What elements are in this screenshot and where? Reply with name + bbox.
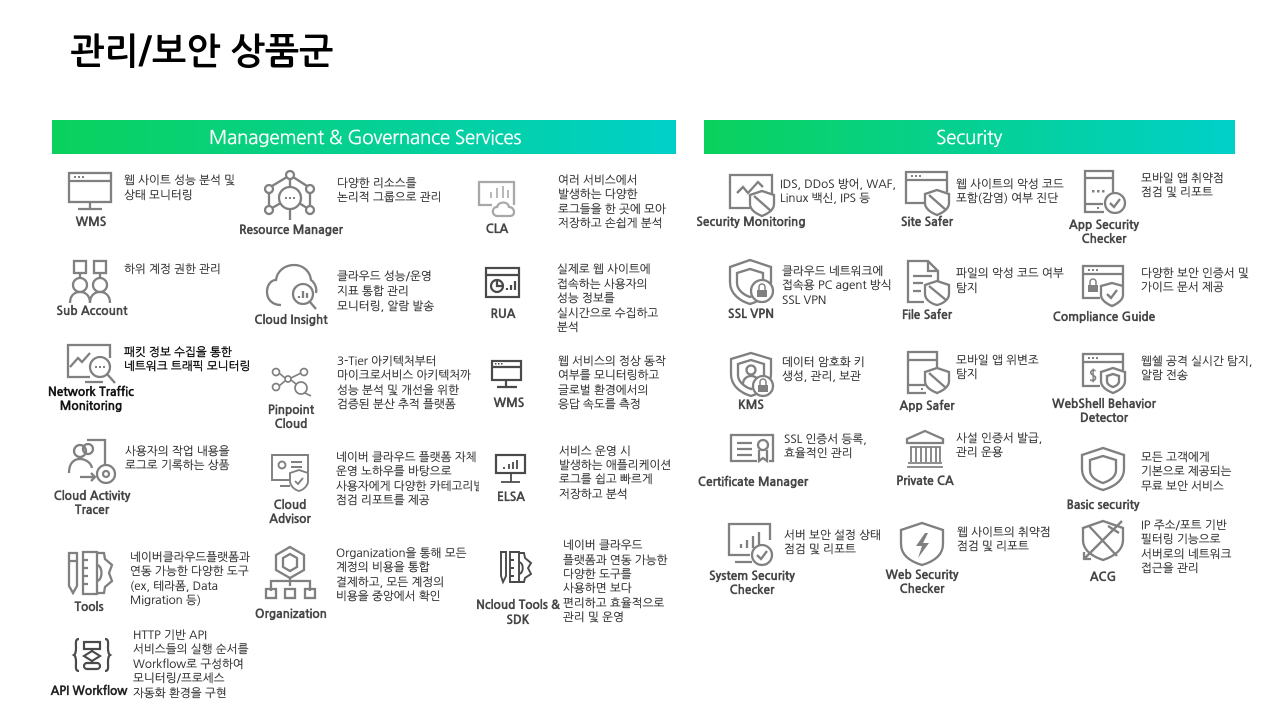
icon: users with gear [69,440,115,483]
description: 결제하고, 모든 계정의 [336,576,444,588]
description: 모니터링/프로세스 [133,672,225,684]
description: 서버 보안 설정 상태 [784,529,881,541]
description: 접속용 PC agent 방식 [782,279,892,291]
description: 가이드 문서 제공 [1141,281,1224,293]
description: 성능 정보를 [557,292,615,304]
description: 검증된 분산 추적 플랫폼 [337,398,456,410]
panel: Security Monitoring [696,175,896,228]
description: 모든 고객에게 [1141,451,1210,463]
description: 논리적 그룹으로 관리 [337,191,442,203]
description: 클라우드 성능/운영 [337,270,432,282]
description: 탐지 [956,282,978,294]
label: ACG [1090,571,1116,583]
icon: chart with shield [730,175,774,216]
panel: WMS small [492,355,666,410]
description: Organization을 통해 모든 [336,547,467,559]
description: 점검 리포트를 제공 [336,494,430,506]
description: Workflow로 구성하여 [133,658,244,670]
description: 사용하면 보다 [563,582,632,594]
icon: phone with shield [908,352,949,393]
label: Private CA [896,475,954,487]
description: 계정의 비용을 통합 [336,561,430,573]
description: 모바일 앱 위변조 [956,354,1039,366]
description: 로그로 기록하는 상품 [125,459,230,471]
icon: cloud with magnifier [267,265,316,309]
description: 점검 및 리포트 [784,543,856,555]
icon: pencil ruler gear [69,552,112,594]
label: Tools [74,601,104,613]
description: (ex, 테라폼, Data [130,580,218,592]
icon: traffic chart and magnifier [68,345,115,383]
description: 운영 노하우를 바탕으로 [336,465,452,477]
description: 파일의 악성 코드 여부 [956,267,1064,279]
description: 실제로 웹 사이트에 [557,263,651,275]
description: Migration 등) [130,594,201,606]
heading: Security: Security [936,128,1002,147]
icon: monitor with shield [272,455,308,491]
panel: Site Safer [901,172,1064,228]
label: Security Monitoring [696,216,806,228]
description: 알람 전송 [1141,369,1188,381]
panel: Tools [69,551,250,613]
icon: shield with lightning [901,523,943,565]
label: Monitoring [60,400,122,412]
label: RUA [491,308,516,320]
description: 연동 가능한 다양한 도구 [130,565,249,577]
description: 기본으로 제공되는 [1141,465,1232,477]
description: 웹 사이트 성능 분석 및 [124,174,235,186]
panel: Cloud Insight [254,265,434,326]
description: IDS, DDoS 방어, WAF, [780,178,896,190]
icon: shield [1082,448,1124,490]
panel: WebShell Behavior Detector [1052,354,1252,424]
description: 클라우드 네트워크에 [782,265,883,277]
panel: Web Security Checker [886,523,1051,595]
label: API Workflow [51,685,128,697]
heading: Management & Governance Services: Management & Governance Services [209,128,521,147]
label: Pinpoint [268,404,315,416]
description: 웹 사이트의 악성 코드 [956,178,1064,190]
description: 사용자에게 다양한 카테고리별 [336,480,484,492]
icon: browser with shield [906,172,949,215]
description: 다양한 리소스를 [337,177,417,189]
description: 비용을 중앙에서 확인 [336,590,441,602]
description: 모니터링, 알람 발송 [337,300,434,312]
panel: Resource Manager [239,171,442,236]
description: SSL VPN [782,294,826,306]
panel: App Security Checker [1069,171,1224,245]
description: 실시간으로 수집하고 [557,307,658,319]
description: 효율적인 관리 [784,447,853,459]
description: 관리 및 운영 [563,611,624,623]
panel: API Workflow [51,629,249,699]
label: SSL VPN [728,308,774,320]
description: 로그를 쉽고 빠르게 [559,473,653,485]
panel: ELSA [496,445,671,503]
description: 글로벌 환경에서의 [558,384,648,396]
label: Sub Account [57,305,128,317]
description: 분석 [557,321,579,333]
description: 네이버 클라우드 플랫폼 자체 [336,451,477,463]
icon: hierarchy [266,547,315,598]
label: App Security [1069,219,1139,231]
panel: App Safer [900,352,1039,412]
label: Cloud Insight [254,314,328,326]
icon: two users [70,261,110,303]
label: Detector [1080,412,1129,424]
label: Cloud [274,499,306,511]
label: Site Safer [901,216,954,228]
heading: Security [704,120,1235,154]
description: 저장하고 분석 [559,488,628,500]
panel: Compliance Guide [1053,266,1249,323]
label: KMS [738,399,764,411]
description: 포함(감염) 여부 진단 [956,192,1058,204]
label: WMS [494,397,524,409]
label: Certificate Manager [698,476,809,488]
icon: browser dollar shield: $ [1088,367,1098,384]
icon: browser with pie chart [486,268,519,297]
label: Resource Manager [239,224,344,236]
description: 웹 사이트의 취약점 [957,526,1051,538]
description: HTTP 기반 API [133,629,207,641]
description: 점검 및 리포트 [957,540,1029,552]
description: 로그들을 한 곳에 모아 [558,203,666,215]
description: 점검 및 리포트 [1141,186,1213,198]
label: Web Security [886,569,959,581]
description: 생성, 관리, 보관 [782,370,861,382]
label: Advisor [269,513,311,525]
panel: File Safer [902,261,1064,321]
description: Linux 백신, IPS 등 [780,192,870,204]
icon: log cloud [479,182,514,216]
panel: Ncloud Tools & SDK [476,539,668,626]
panel: Organization [255,547,467,620]
label: App Safer [900,400,955,412]
label: Network Traffic [48,386,134,398]
description: 서비스 운영 시 [559,445,631,457]
label: Tracer [75,504,110,516]
title: 관리/보안 상품군 [70,33,333,70]
icon: monitor with check [729,524,772,565]
icon: phone with check [1085,171,1125,213]
description: 네이버 클라우드 [563,539,643,551]
label: Ncloud Tools & [476,599,560,611]
panel: CLA [479,174,666,235]
panel: Cloud Advisor [269,451,484,525]
panel: Cloud Activity Tracer [54,440,230,516]
description: 서버로의 네트워크 [1141,548,1232,560]
description: 무료 보안 서비스 [1141,480,1224,492]
description: 사설 인증서 발급, [956,432,1042,444]
description: 저장하고 손쉽게 분석 [558,217,663,229]
description: 관리 운용 [956,446,1003,458]
description: 사용자의 작업 내용을 [125,445,230,457]
panel: Basic security [1067,448,1232,511]
description: 다양한 도구를 [563,568,632,580]
panel: KMS [731,353,865,411]
icon: shield with crossed arrows [1083,521,1123,560]
label: Cloud [275,418,307,430]
label: SDK [507,614,530,626]
icon: browser dollar shield [1083,354,1125,393]
label: Checker [1082,233,1127,245]
description: 모바일 앱 취약점 [1141,172,1224,184]
description: 네이버클라우드플랫폼과 [130,551,250,563]
label: CLA [486,223,509,235]
description: 필터링 기능으로 [1141,533,1221,545]
description: 성능 분석 및 개선을 위한 [337,384,459,396]
icon: monitor [69,173,111,209]
panel: WMS [69,173,235,228]
description: 하위 계정 권한 관리 [124,263,221,275]
icon: monitor [492,361,521,387]
description: 지표 통합 관리 [337,285,409,297]
label: Organization [255,608,327,620]
description: 자동화 환경을 구현 [133,687,227,699]
description: 패킷 정보 수집을 통한 [124,346,232,358]
description: 발생하는 애플리케이션 [559,459,671,471]
description: 응답 속도를 측정 [558,398,641,410]
icon: trace nodes [272,368,311,396]
label: Basic security [1067,499,1140,511]
panel: Sub Account [57,261,221,317]
panel: SSL VPN [728,260,892,320]
label: Checker [730,584,775,596]
description: 접근을 관리 [1141,562,1199,574]
label: Compliance Guide [1053,311,1156,323]
label: Checker [900,583,945,595]
description: 3-Tier 아키텍처부터 [337,355,437,367]
description: 접속하는 사용자의 [557,278,647,290]
panel: System Security Checker [709,524,881,596]
panel: Network Traffic Monitoring [48,345,250,412]
description: 웹쉘 공격 실시간 탐지, [1141,355,1252,367]
description: 다양한 보안 인증서 및 [1141,267,1249,279]
panel: RUA [486,263,658,333]
icon: file with shield [908,261,949,305]
icon: monitor with bars [496,455,525,482]
label: Cloud Activity [54,490,131,502]
description: 탐지 [956,368,978,380]
label: System Security [709,570,795,582]
description: 네트워크 트래픽 모니터링 [124,360,250,372]
description: 플랫폼과 연동 가능한 [563,554,668,566]
description: 데이터 암호화 키 [782,356,865,368]
description: 여러 서비스에서 [558,174,638,186]
label: File Safer [902,309,953,321]
description: 마이크로서비스 아키텍처까 [337,369,471,381]
icon: shield with lock [730,260,773,304]
description: 서비스들의 실행 순서를 [133,643,249,655]
icon: shield with person and lock [731,353,773,396]
description: 여부를 모니터링하고 [558,369,659,381]
description: 발생하는 다양한 [558,188,638,200]
description: SSL 인증서 등록, [784,433,867,445]
icon: pencil ruler gear [501,552,531,582]
label: WMS [76,216,106,228]
panel: Private CA [896,431,1042,487]
heading: Management & Governance Services [52,120,676,154]
label: WebShell Behavior [1052,398,1156,410]
panel: Certificate Manager [698,433,867,488]
description: 편리하고 효율적으로 [563,597,664,609]
icon: network nodes [265,171,314,220]
panel: Pinpoint Cloud [268,355,471,430]
icon: institution building [907,431,943,467]
description: 웹 서비스의 정상 동작 [558,355,666,367]
description: 상태 모니터링 [124,189,193,201]
panel: ACG [1083,519,1232,583]
icon: workflow braces [74,639,110,671]
label: ELSA [497,491,525,503]
icon: browser lock shield [1083,266,1123,306]
icon: certificate [731,435,773,461]
description: IP 주소/포트 기반 [1141,519,1227,531]
